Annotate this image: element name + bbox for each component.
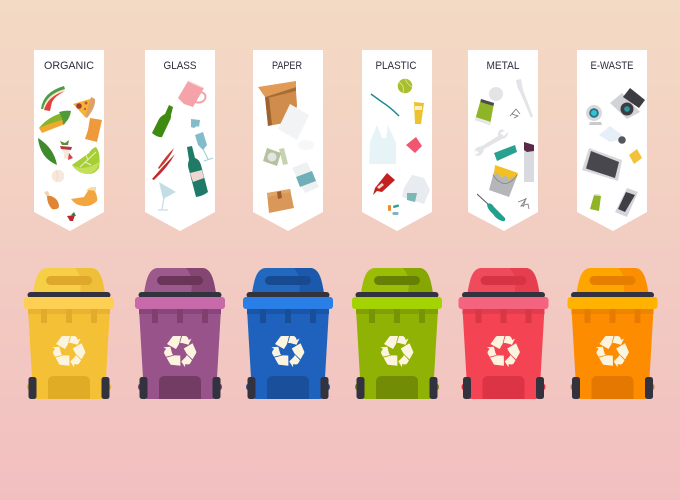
panel: paper banner: [253, 50, 323, 231]
heading: paper: PAPER: [272, 60, 302, 72]
icon: tennis ball: [398, 79, 412, 93]
icon: corn: [39, 111, 71, 133]
heading: e-waste: E-WASTE: [590, 60, 634, 72]
icon: plastic bag: [369, 125, 396, 164]
panel: plastic banner: [362, 50, 432, 231]
icon: tablet: [582, 148, 622, 181]
icon: can lid: [489, 87, 503, 101]
bin: e-waste orange: [568, 268, 658, 399]
icon: martini glass: [158, 182, 176, 210]
bin: glass purple: [135, 268, 225, 399]
icon: tin can: [475, 99, 494, 125]
icon: pink mug: [178, 81, 205, 107]
icon: plastic jug: [402, 175, 430, 204]
icon: sheet of paper: [278, 104, 309, 140]
icon: teal bar: [494, 145, 517, 161]
icon: smartphone: [615, 188, 638, 217]
icon: screws: [518, 198, 529, 209]
icon: crumpled paper: [298, 140, 314, 150]
icon: wrench: [474, 129, 508, 156]
icon: camera: [610, 88, 645, 119]
bin: metal red: [458, 268, 548, 399]
icon: pizza slice: [73, 97, 95, 118]
icon: green leaf: [38, 138, 57, 165]
icon: watermelon: [41, 86, 65, 111]
heading: glass: GLASS: [164, 60, 196, 72]
icon: paint bucket: [489, 165, 518, 197]
icon: cracker: [85, 118, 102, 142]
bin: plastic green: [352, 268, 442, 399]
icon: light bulb: [599, 126, 626, 144]
icon: apple core: [60, 140, 73, 160]
icon: webcam: [586, 105, 602, 125]
icon: yellow chip: [629, 149, 642, 164]
icon: carton: [292, 162, 319, 193]
panel: organic banner: [34, 50, 104, 231]
icon: green bottle: [152, 105, 173, 137]
icon: lettuce: [72, 147, 100, 174]
icon: wine glass: [195, 132, 213, 161]
icon: red bottle: [373, 173, 395, 195]
icon: bent wire: [510, 109, 520, 118]
icon: blue glass shard: [191, 119, 200, 128]
icon: garlic: [52, 170, 64, 182]
heading: organic: ORGANIC: [44, 60, 94, 72]
bin: organic yellow: [24, 268, 114, 399]
icon: wine bottle: [187, 146, 208, 197]
icon: strawberry: [67, 212, 76, 221]
icon: fork: [516, 79, 533, 118]
icon: pills: [388, 204, 399, 215]
icon: parcel box: [267, 189, 294, 213]
icon: melon rind: [71, 187, 97, 206]
icon: screwdriver: [477, 194, 505, 221]
icon: pink cup: [406, 137, 422, 153]
icon: red shards: [152, 148, 175, 180]
icon: battery: [590, 194, 601, 211]
panel: glass banner: [145, 50, 215, 231]
bin: paper blue: [243, 268, 333, 399]
panel: e-waste banner: [577, 50, 647, 231]
icon: yellow tube: [414, 102, 424, 124]
icon: aerosol bottle: [524, 142, 534, 182]
heading: plastic: PLASTIC: [376, 60, 417, 72]
icon: cardboard box open: [258, 81, 297, 126]
icon: green envelope: [263, 148, 288, 166]
panel: metal banner: [468, 50, 538, 231]
heading: metal: METAL: [486, 60, 520, 72]
icon: chicken leg: [44, 191, 59, 209]
icon: toothbrush: [371, 94, 399, 116]
